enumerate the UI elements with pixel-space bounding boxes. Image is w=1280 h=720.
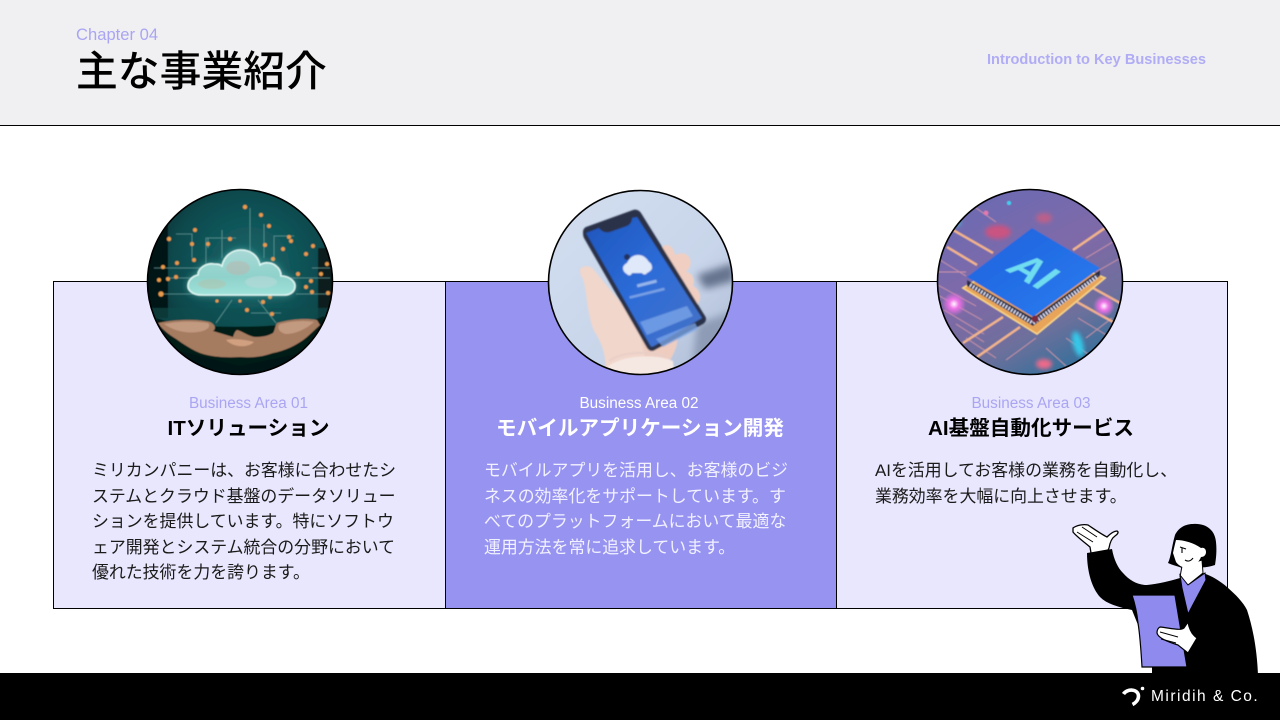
description: 業務効率を大幅に向上させます。	[875, 486, 1127, 506]
logo: Miridih & Co.	[1122, 686, 1259, 706]
face	[1173, 540, 1206, 568]
heading: AI automation service: AI基盤自動化サービス	[928, 417, 1134, 440]
description	[484, 461, 788, 556]
cloud glow	[188, 250, 295, 295]
description: ションを提供しています。特にソフトウ	[92, 512, 394, 531]
description: ェア開発とシステム統合の分野において	[92, 538, 395, 556]
heading: mobile app development: モバイルアプリケーション開発	[496, 417, 784, 440]
phone	[583, 210, 706, 351]
description: ステムとクラウド基盤のデータソリュー	[92, 486, 396, 506]
description	[92, 461, 396, 582]
panel: mobile apps	[445, 281, 837, 609]
AI lettering on chip: AI	[997, 247, 1071, 296]
chapter label: Chapter 04	[76, 25, 158, 44]
fingers	[662, 245, 700, 307]
sleeve	[607, 356, 674, 374]
panel: IT solutions	[53, 281, 446, 609]
description: 優れた技術を力を誇ります。	[92, 563, 310, 582]
suit	[1087, 549, 1258, 675]
shirt collar	[1180, 573, 1206, 614]
raised hand	[1073, 525, 1118, 553]
cloud	[188, 250, 295, 295]
description: AIを活用してお客様の業務を自動化し、	[875, 461, 1177, 480]
holding hand	[1157, 622, 1197, 653]
hand	[580, 266, 645, 368]
neck	[1180, 560, 1203, 585]
description: ネスの効率化をサポートしています。す	[484, 486, 786, 506]
label: Business Area 03: Business Area 03	[971, 395, 1091, 412]
text block: area 01	[92, 395, 396, 582]
photo: AI chip	[936, 188, 1124, 376]
English subtitle: Introduction to Key Businesses	[987, 52, 1206, 68]
logo wordmark: Miridih & Co.	[1151, 688, 1259, 705]
description	[875, 461, 1177, 506]
label: Business Area 01: Business Area 01	[189, 395, 308, 412]
description: ミリカンパニーは、お客様に合わせたシ	[92, 461, 396, 480]
footer band	[0, 673, 1280, 720]
label: Business Area 02: Business Area 02	[579, 395, 699, 412]
chip substrate	[961, 272, 1107, 336]
panel: AI automation	[836, 281, 1228, 609]
illustration: presenter	[1072, 524, 1258, 673]
photo: smartphone in hand	[548, 190, 734, 376]
car icon	[623, 255, 652, 275]
logo mark	[1122, 686, 1144, 706]
text block: area 02	[484, 395, 788, 556]
clipboard	[1132, 595, 1187, 667]
description: モバイルアプリを活用し、お客様のビジ	[484, 461, 788, 480]
hair	[1168, 524, 1216, 568]
title: 主な事業紹介	[76, 48, 327, 95]
photo: cloud over hands	[146, 188, 334, 376]
description: べてのプラットフォームにおいて最適な	[484, 512, 786, 531]
dark base behind hands	[180, 351, 297, 374]
text block: area 03	[875, 395, 1177, 506]
chip top	[967, 228, 1100, 317]
heading: IT solutions: ITソリューション	[167, 417, 330, 440]
description: 運用方法を常に追求しています。	[484, 538, 735, 556]
header band	[0, 0, 1280, 126]
hands	[158, 319, 320, 357]
